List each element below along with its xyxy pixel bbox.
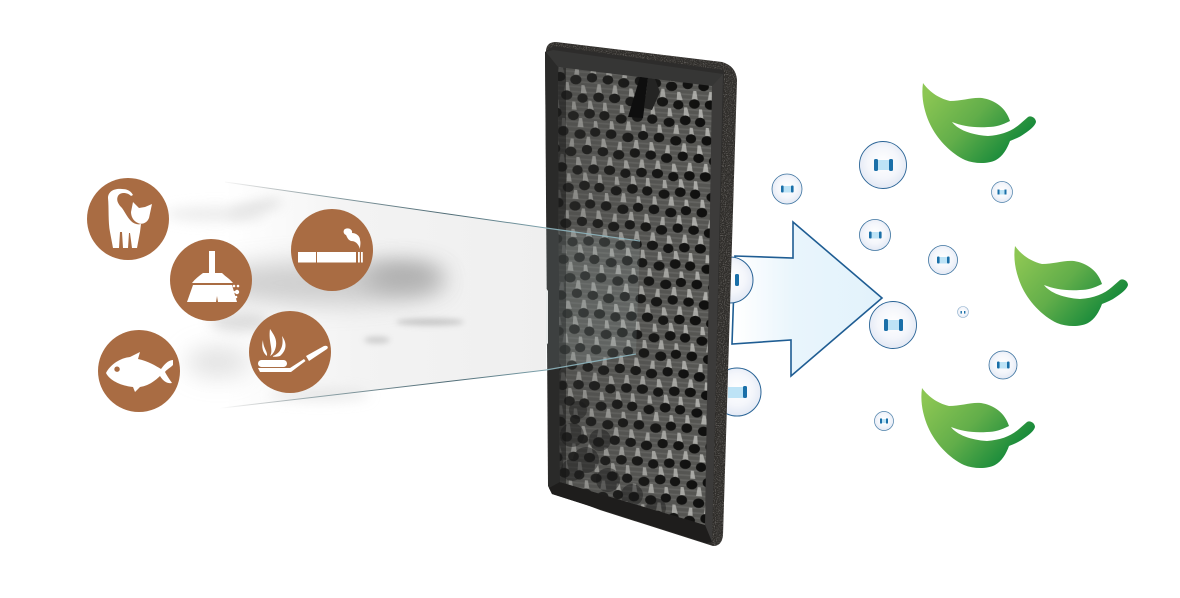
leaf: top xyxy=(922,83,1036,163)
bubble: partly hidden behind filter (lower) xyxy=(713,368,761,416)
bubble 7 xyxy=(958,306,968,318)
dark honeycomb cells, bottom left xyxy=(560,401,666,518)
icon: frying pan with flames xyxy=(249,311,331,393)
bubble: partly hidden behind filter (upper) xyxy=(707,257,753,303)
icon: fish xyxy=(98,330,180,412)
white nick in frame xyxy=(546,288,548,346)
arrow: clean air out xyxy=(732,222,882,376)
bubble 9 xyxy=(874,412,894,430)
bubble 1 xyxy=(860,142,906,188)
frame xyxy=(545,46,724,544)
cone lines continuing over filter xyxy=(546,228,640,370)
bubble 6 xyxy=(992,182,1012,202)
icon: broom and dust xyxy=(170,239,252,321)
bubble 5 xyxy=(870,302,916,348)
bubble 4 xyxy=(928,246,958,274)
infographic: air filter cleaning illustration xyxy=(87,42,1128,546)
leaf: bottom xyxy=(921,388,1035,468)
icon: cigarette xyxy=(291,209,373,291)
foam backing xyxy=(546,42,737,546)
bubble 8 xyxy=(989,351,1017,379)
carbon mesh xyxy=(558,67,712,525)
cone edge lines xyxy=(205,182,546,410)
bubble 2 xyxy=(772,174,802,204)
pull tab xyxy=(628,77,648,118)
bubble 3 xyxy=(860,220,890,250)
clean air bubbles xyxy=(772,142,1017,430)
air cone entering filter xyxy=(225,182,546,408)
leaf: middle xyxy=(1014,246,1128,326)
smoke cloud xyxy=(165,196,464,401)
filter: foam backing, frame and mesh xyxy=(540,38,740,550)
icon: cat xyxy=(87,178,169,260)
